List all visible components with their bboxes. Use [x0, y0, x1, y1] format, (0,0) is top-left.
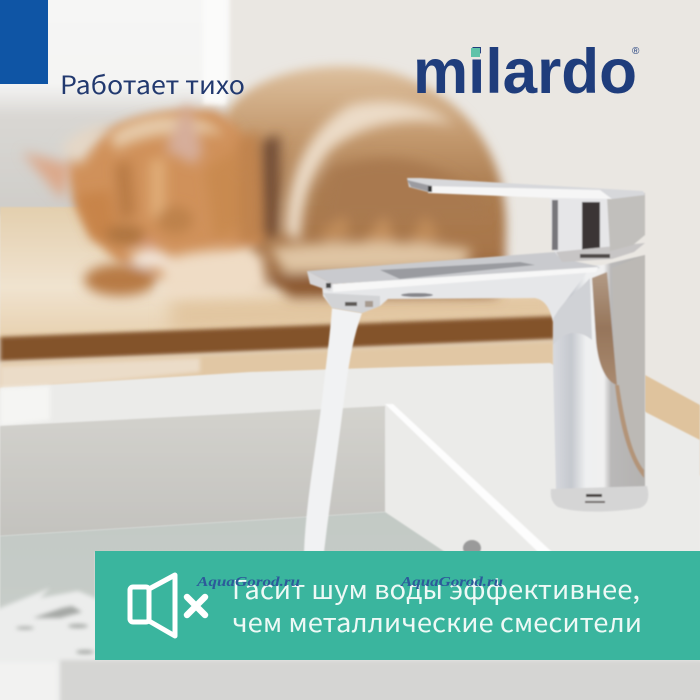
- sleeping cat: [22, 66, 506, 298]
- teal callout panel: [95, 551, 700, 660]
- watermark: AquaGorod.ru: [196, 575, 300, 590]
- callout text: чем металлические смесители: [232, 603, 642, 640]
- lever handle: [407, 178, 645, 199]
- callout text: [232, 570, 642, 640]
- icon: muted speaker: [130, 575, 205, 636]
- faucet body: [553, 255, 645, 490]
- cat body: [225, 66, 506, 292]
- cat head: [66, 109, 266, 279]
- wooden shelf: [0, 207, 700, 476]
- water stream: [304, 308, 362, 552]
- spout underside: [322, 265, 610, 322]
- blue corner square: [0, 0, 48, 84]
- spout aerator: [323, 293, 380, 313]
- background wall: [0, 0, 700, 420]
- cartridge cylinder: [550, 196, 612, 256]
- faucet base ring: [551, 486, 648, 512]
- logo: milardo: milardo: [413, 37, 637, 107]
- basin back wall: [0, 406, 385, 536]
- chrome faucet: [307, 178, 648, 512]
- lower water highlights: [0, 588, 700, 700]
- watermark: [196, 575, 503, 590]
- callout text: Гасит шум воды эффективнее,: [232, 570, 640, 607]
- spout top plate: [307, 252, 600, 284]
- sink water: [0, 512, 445, 660]
- basin side highlight: [385, 404, 552, 552]
- lever cap: [607, 193, 645, 251]
- heading: Работает тихо: [60, 66, 245, 102]
- sink: [0, 363, 700, 700]
- watermark: AquaGorod.ru: [400, 575, 503, 590]
- logo: milardo: ®: [632, 46, 640, 57]
- drain knob: [463, 540, 481, 556]
- cat fur markings: [22, 100, 498, 298]
